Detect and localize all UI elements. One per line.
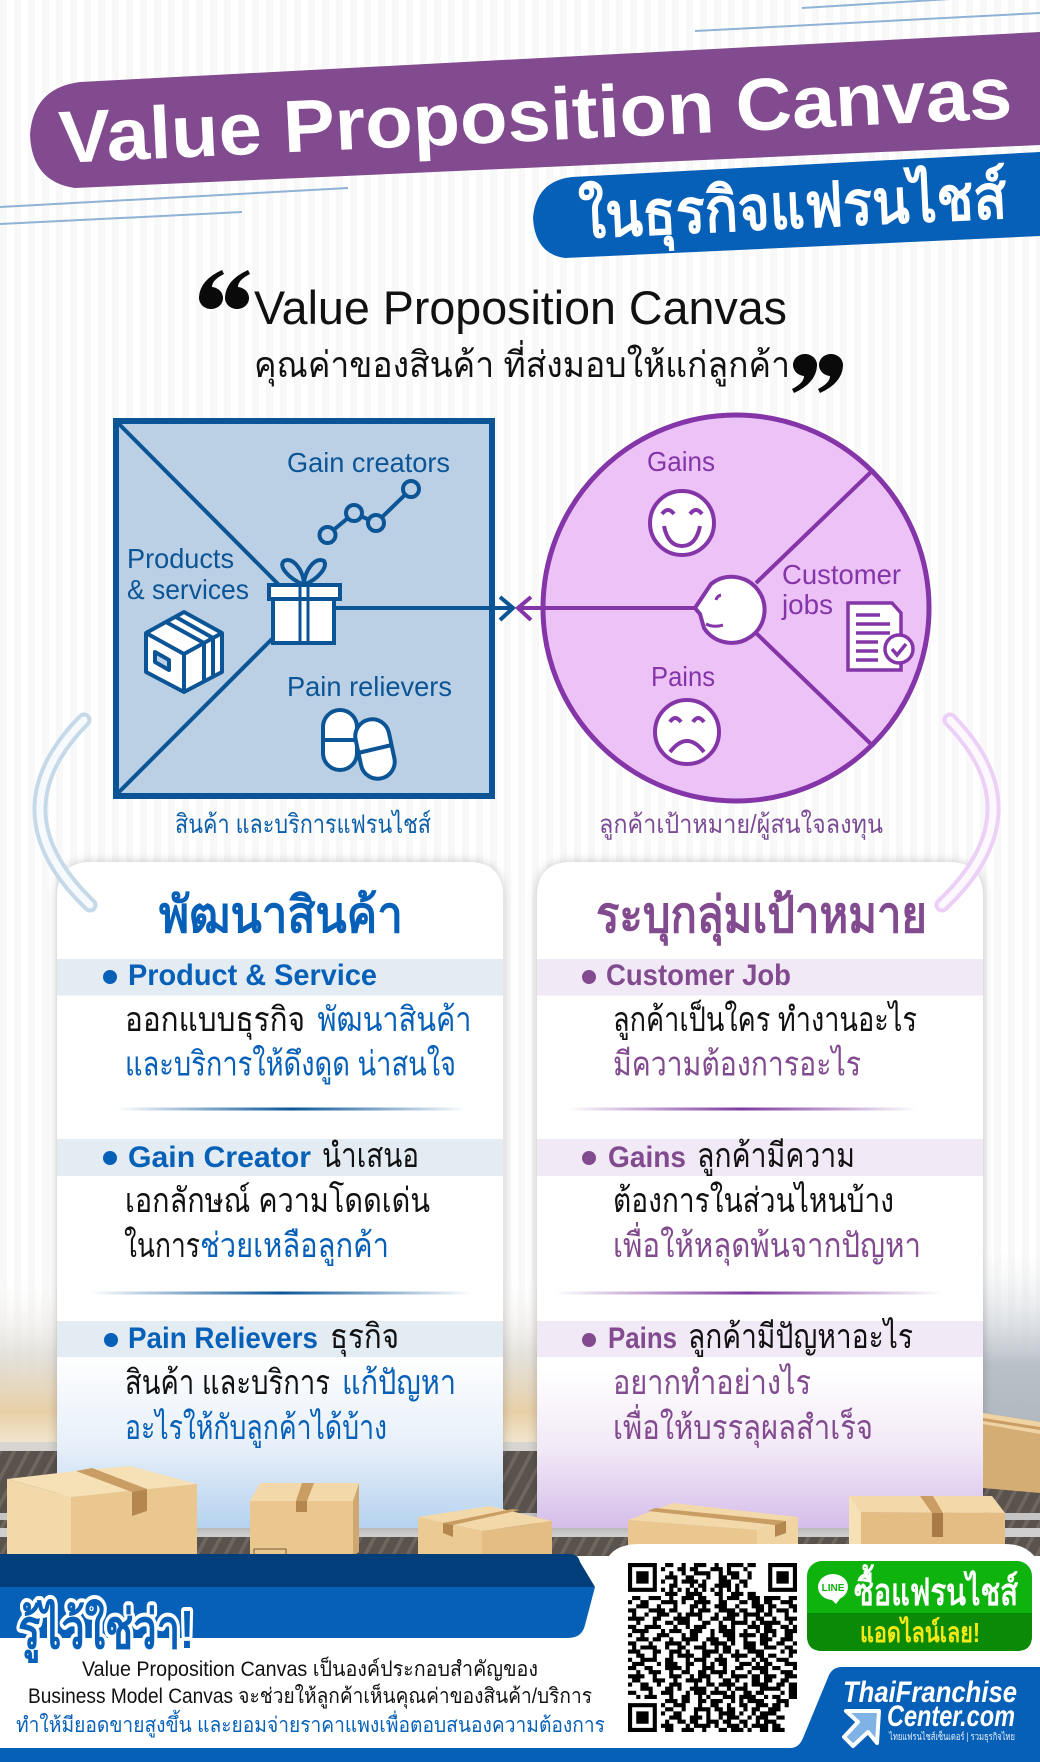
title banner: purple — [30, 32, 1040, 188]
item: customer job: Customer Job — [606, 959, 791, 992]
footer: white info area — [0, 1544, 1040, 1748]
quote section — [199, 270, 843, 393]
item: pain relievers: Pain Relievers — [128, 1322, 318, 1355]
icon: sad face — [655, 700, 719, 764]
callout text: ทำให้มียอดขายสูงขึ้น และยอมจ่ายราคาแพงเพื่อตอบสนองความต้องการ — [16, 1710, 605, 1738]
icon: smiley face — [650, 491, 714, 555]
item: product and service: พัฒนาสินค้า — [318, 1001, 472, 1039]
icon: line chart — [320, 481, 419, 543]
item: customer job: ลูกค้าเป็นใคร ทำงานอะไร — [613, 999, 917, 1040]
cardboard boxes — [7, 1413, 1040, 1556]
arrow: value map to customer — [334, 597, 513, 620]
icon: document with check — [848, 603, 913, 670]
icon: customer head — [695, 577, 765, 643]
item: pains — [537, 1317, 983, 1448]
quote heading: Value Proposition Canvas — [254, 281, 787, 334]
icon: LINE bubble — [818, 1574, 848, 1604]
panel heading: พัฒนาสินค้า — [159, 887, 403, 943]
icon: closing quote mark — [792, 354, 843, 393]
footer: blue banner — [0, 1554, 595, 1638]
label: products and services: & services — [127, 574, 249, 605]
title text: Value Proposition Canvas — [57, 51, 1014, 179]
subtitle banner: blue — [533, 152, 1040, 258]
item: pains: อยากทำอย่างไร — [613, 1363, 811, 1402]
box 1 — [7, 1466, 197, 1556]
caption: target customers: ลูกค้าเป้าหมาย/ผู้สนใจลงทุน — [599, 809, 883, 840]
label: customer jobs — [781, 559, 901, 620]
icon: gift — [269, 560, 340, 643]
item: pain relievers — [57, 1318, 503, 1448]
callout text — [16, 1655, 605, 1738]
callout text: Value Proposition Canvas เป็นองค์ประกอบสำคัญของ — [82, 1655, 538, 1681]
button sub-label: แอดไลน์เลย! — [860, 1616, 980, 1648]
callout heading: รู้ไว้ใช่ว่า! — [18, 1598, 194, 1663]
icon: arrow — [844, 1711, 879, 1746]
item: gains — [537, 1137, 983, 1266]
value map square — [116, 421, 513, 796]
panel: product development — [57, 862, 503, 1528]
label: customer jobs: Customer — [782, 559, 901, 590]
label: products and services — [127, 543, 249, 605]
box 3 — [418, 1506, 552, 1556]
item: gain creator: ช่วยเหลือลูกค้า — [200, 1227, 389, 1266]
panel heading: ระบุกลุ่มเป้าหมาย — [596, 887, 927, 946]
label: customer jobs: jobs — [781, 589, 833, 620]
item: pain relievers: ธุรกิจ — [330, 1318, 399, 1357]
item: pains: Pains — [608, 1322, 677, 1355]
item: gains: เพื่อให้หลุดพ้นจากปัญหา — [613, 1222, 921, 1266]
caption: franchise products: สินค้า และบริการแฟรนไชส์ — [175, 809, 431, 839]
quote subheading: คุณค่าของสินค้า ที่ส่งมอบให้แก่ลูกค้า — [254, 340, 790, 387]
item: pain relievers: อะไรให้กับลูกค้าได้บ้าง — [125, 1408, 387, 1448]
label: gains: Gains — [647, 446, 715, 477]
icon: opening quote mark — [199, 270, 250, 309]
label: gain creators: Gain creators — [287, 447, 450, 478]
item: gain creator: Gain Creator — [128, 1141, 311, 1174]
background: cool wall tint, right — [540, 1250, 1040, 1442]
item: customer job: มีความต้องการอะไร — [613, 1044, 861, 1084]
box 5 — [849, 1496, 1005, 1556]
item: product and service: Product & Service — [128, 959, 377, 992]
item: gain creator: เอกลักษณ์ ความโดดเด่น — [125, 1181, 430, 1220]
item: pain relievers: สินค้า และบริการ — [125, 1364, 330, 1402]
footer: logo and base band — [0, 1667, 1040, 1762]
decorative arc: right — [942, 720, 993, 905]
icon: pills — [323, 710, 398, 782]
item: pains: ลูกค้ามีปัญหาอะไร — [688, 1317, 913, 1357]
item: product and service: ออกแบบธุรกิจ — [125, 1001, 305, 1040]
item: customer job — [537, 959, 983, 1084]
item: pain relievers: แก้ปัญหา — [342, 1364, 456, 1402]
QR code — [628, 1565, 797, 1730]
panel: target customers — [537, 862, 983, 1528]
icon: cardboard box — [146, 612, 222, 692]
callout text: Business Model Canvas จะช่วยให้ลูกค้าเห็นคุณค่าของสินค้า/บริการ — [28, 1682, 592, 1709]
background: warm wall tint, left — [0, 1270, 540, 1442]
label: pain relievers: Pain relievers — [287, 671, 452, 702]
box 2 — [250, 1483, 359, 1556]
box 6 — [983, 1413, 1040, 1493]
item: product and service: และบริการให้ดึงดูด น่าสนใจ — [125, 1044, 456, 1084]
item: pains: เพื่อให้บรรลุผลสำเร็จ — [613, 1404, 873, 1448]
LINE button — [807, 1561, 1032, 1651]
item: gain creator: ในการ — [124, 1226, 200, 1265]
item: gains: ต้องการในส่วนไหนบ้าง — [613, 1181, 894, 1220]
arrow: customer to value map — [518, 597, 696, 620]
label: pains: Pains — [651, 661, 715, 692]
item: gain creator — [57, 1137, 503, 1266]
item: gains: Gains — [608, 1141, 686, 1174]
customer profile circle — [518, 415, 929, 801]
item: gain creator: นำเสนอ — [322, 1137, 419, 1175]
label: products and services: Products — [127, 543, 234, 574]
item: gains: ลูกค้ามีความ — [697, 1137, 855, 1176]
background: conveyor belt — [0, 1442, 1040, 1556]
icon: LINE bubble: LINE — [822, 1583, 845, 1594]
box 4 — [628, 1503, 798, 1556]
header accent lines — [0, 0, 1040, 224]
logo: ThaiFranchise Center — [843, 1676, 1017, 1746]
decorative arc: left — [40, 720, 90, 905]
item: product and service — [57, 959, 503, 1084]
